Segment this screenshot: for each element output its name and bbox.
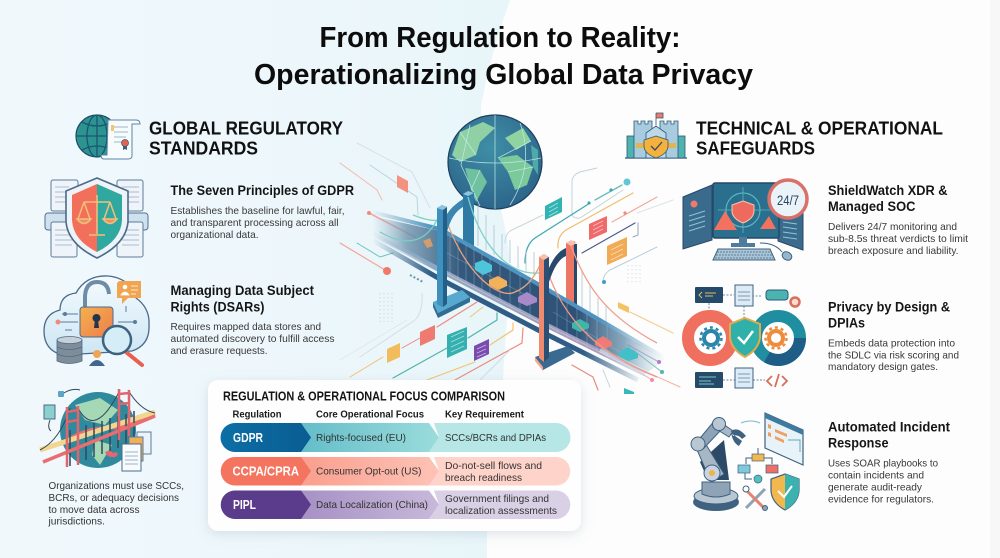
blue tower — [433, 191, 474, 318]
icon: privacy by design loop — [688, 285, 800, 388]
text: automated incident response: generate audit-ready — [828, 482, 923, 494]
text: privacy by design: DPIAs — [828, 316, 865, 330]
data flow lines — [340, 143, 680, 390]
row: GDPR — [220, 423, 570, 452]
text: automated incident response: contain incidents and — [828, 470, 924, 482]
row: GDPR: GDPR — [233, 431, 263, 445]
coral tower — [535, 240, 577, 371]
icon: robot arm incident response — [691, 413, 803, 511]
icon: SOC monitors with 24/7 clock — [683, 180, 807, 262]
text: seven principles: The Seven Principles of GDPR — [170, 183, 354, 198]
heading: SAFEGUARDS — [696, 138, 815, 158]
text: privacy by design: Embeds data protection into — [828, 338, 955, 350]
text: ShieldWatch: Delivers 24/7 monitoring and — [828, 221, 957, 233]
title: From Regulation to Reality: — [320, 22, 680, 54]
text: cross-border transfers: to move data across — [48, 504, 140, 516]
text: seven principles: Establishes the baseline for lawful, fair, — [170, 205, 344, 217]
central bridge illustration — [340, 115, 680, 394]
text: DSARs: Requires mapped data stores and — [170, 321, 321, 333]
row: CCPA/CPRA: breach readiness — [445, 472, 522, 484]
text: cross-border transfers: jurisdictions. — [48, 516, 105, 528]
text: privacy by design: the SDLC via risk scoring and — [828, 350, 959, 362]
text: DSARs: Rights (DSARs) — [170, 300, 264, 314]
row: GDPR: SCCs/BCRs and DPIAs — [445, 432, 546, 444]
text: automated incident response: Uses SOAR playbooks to — [828, 458, 938, 470]
column headers: Core Operational Focus — [316, 408, 424, 420]
icon: castle with shield — [625, 113, 687, 158]
heading — [696, 118, 943, 158]
text: ShieldWatch: breach exposure and liability. — [828, 245, 958, 257]
back cables and suspenders — [413, 197, 657, 343]
icon: GDPR shield with scales — [45, 178, 148, 258]
heading: TECHNICAL & OPERATIONAL — [696, 118, 943, 138]
row: CCPA/CPRA: Consumer Opt-out (US) — [316, 466, 422, 478]
row: CCPA/CPRA — [221, 457, 570, 486]
text: seven principles — [170, 183, 354, 241]
column headers: Key Requirement — [445, 408, 524, 420]
text: cross-border transfers: BCRs, or adequacy decisions — [48, 492, 179, 504]
row: CCPA/CPRA: CCPA/CPRA — [232, 464, 299, 478]
row: PIPL: PIPL — [233, 498, 256, 512]
text: DSARs — [170, 283, 334, 357]
text: automated incident response — [828, 420, 950, 506]
row: PIPL: localization assessments — [445, 505, 557, 517]
column headers — [232, 408, 524, 420]
row: CCPA/CPRA: Do-not-sell flows and — [445, 460, 542, 472]
icon: SOC monitors with 24/7 clock: 24/7 — [777, 192, 799, 208]
text: seven principles: organizational data. — [170, 229, 258, 241]
text: cross-border transfers: Organizations must use SCCs, — [48, 480, 184, 492]
icon: globe and certificate scroll — [76, 115, 140, 159]
text: ShieldWatch: ShieldWatch XDR & — [828, 183, 948, 198]
title: Operationalizing Global Data Privacy — [254, 59, 753, 91]
panel: technical and operational safeguards — [625, 113, 968, 511]
row: PIPL: Government filings and — [445, 493, 549, 505]
text: ShieldWatch — [828, 183, 968, 257]
floating data documents — [387, 175, 634, 394]
globe — [448, 115, 542, 209]
heading: STANDARDS — [149, 138, 258, 158]
text: automated incident response: evidence for regulators. — [828, 494, 934, 506]
text: privacy by design: Privacy by Design & — [828, 300, 950, 314]
data dots and dot grids — [367, 178, 664, 382]
text: automated incident response: Automated Incident — [828, 420, 950, 434]
text: privacy by design: mandatory design gates. — [828, 361, 938, 373]
bridge back tower legs — [463, 192, 577, 312]
column headers: Regulation — [232, 408, 282, 420]
front cables — [380, 207, 657, 377]
row: PIPL — [221, 490, 570, 519]
bridge deck — [372, 212, 665, 380]
row: GDPR: Rights-focused (EU) — [316, 432, 406, 444]
table title: REGULATION & OPERATIONAL FOCUS COMPARISON — [223, 390, 505, 404]
text: ShieldWatch: sub-8.5s threat verdicts to limit — [828, 233, 968, 245]
icon: cloud lock with magnifier — [44, 276, 149, 366]
text: ShieldWatch: Managed SOC — [828, 199, 916, 214]
row: PIPL: Data Localization (China) — [316, 499, 428, 511]
text: privacy by design — [828, 300, 959, 373]
text: DSARs: automated discovery to fulfill access — [170, 333, 334, 345]
text: DSARs: Managing Data Subject — [170, 283, 314, 298]
vehicles — [423, 238, 638, 361]
panel: global regulatory standards — [40, 115, 354, 528]
text: seven principles: and transparent processing across all — [170, 217, 338, 229]
title — [254, 22, 753, 91]
heading: GLOBAL REGULATORY — [149, 118, 344, 138]
icon: globe with bridge and documents — [40, 389, 155, 471]
heading — [149, 118, 344, 158]
text: DSARs: and erasure requests. — [170, 345, 268, 357]
text: cross-border transfers — [48, 480, 184, 528]
panel: regulation comparison table — [208, 380, 581, 531]
text: automated incident response: Response — [828, 436, 889, 450]
